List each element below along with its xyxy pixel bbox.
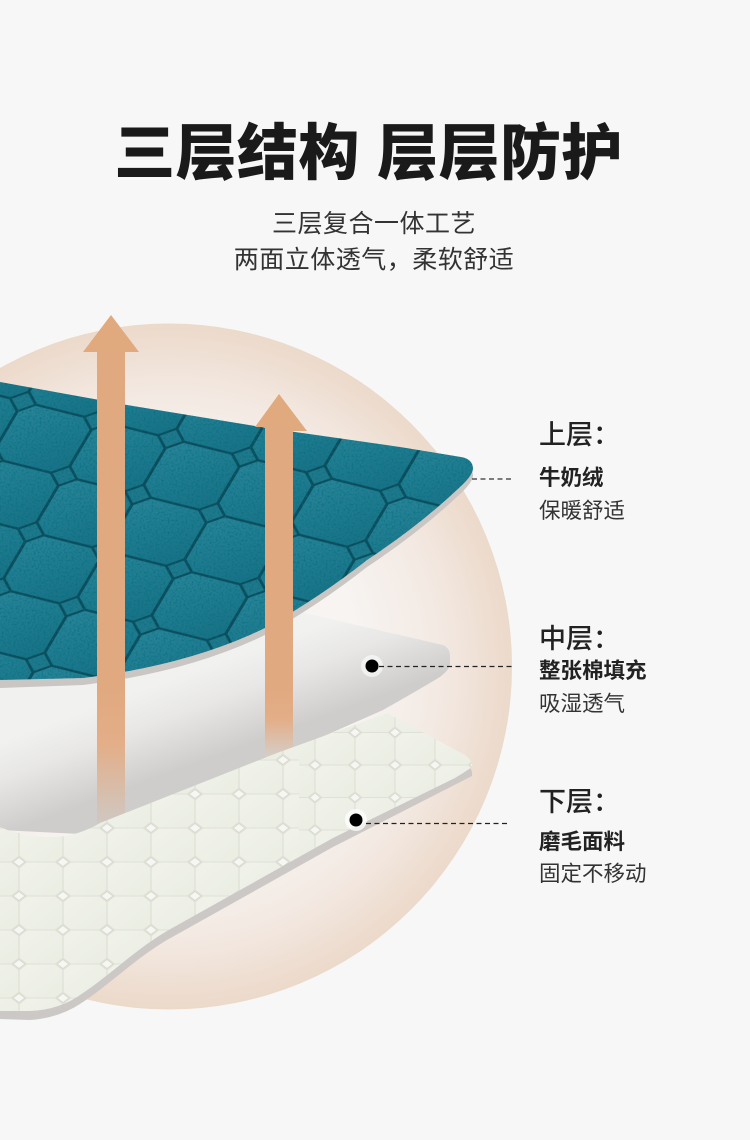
label: middle layer: 整张棉填充 (539, 659, 647, 683)
pointer: top layer (472, 478, 514, 480)
label: top layer (539, 420, 625, 523)
arrow: large airflow (83, 315, 139, 828)
label: middle layer: 吸湿透气 (539, 692, 625, 716)
label: top layer: 上层： (539, 420, 620, 450)
subtitle (234, 210, 514, 274)
label: middle layer (539, 624, 647, 716)
label: bottom layer: 磨毛面料 (539, 830, 626, 854)
title: 三层结构 层层防护 (114, 119, 623, 187)
label: top layer: 保暖舒适 (539, 499, 625, 523)
pointer: bottom layer (345, 809, 510, 831)
infographic canvas (0, 121, 646, 1020)
top layer shadow edge (0, 389, 473, 688)
label: middle layer: 中层： (539, 624, 620, 654)
subtitle: 三层复合一体工艺 (272, 210, 476, 238)
layer: top plush fabric (0, 370, 480, 690)
label: bottom layer: 下层： (539, 787, 620, 817)
label: bottom layer (539, 787, 647, 886)
background disc (0, 324, 512, 1010)
subtitle: 两面立体透气，柔软舒适 (234, 246, 514, 274)
pointer: middle layer (361, 655, 512, 677)
label: bottom layer: 固定不移动 (539, 862, 647, 886)
layer: bottom brushed fabric (0, 700, 479, 1020)
layer: middle cotton filling (0, 612, 450, 835)
label: top layer: 牛奶绒 (539, 466, 604, 490)
arrow: small airflow (255, 394, 307, 757)
